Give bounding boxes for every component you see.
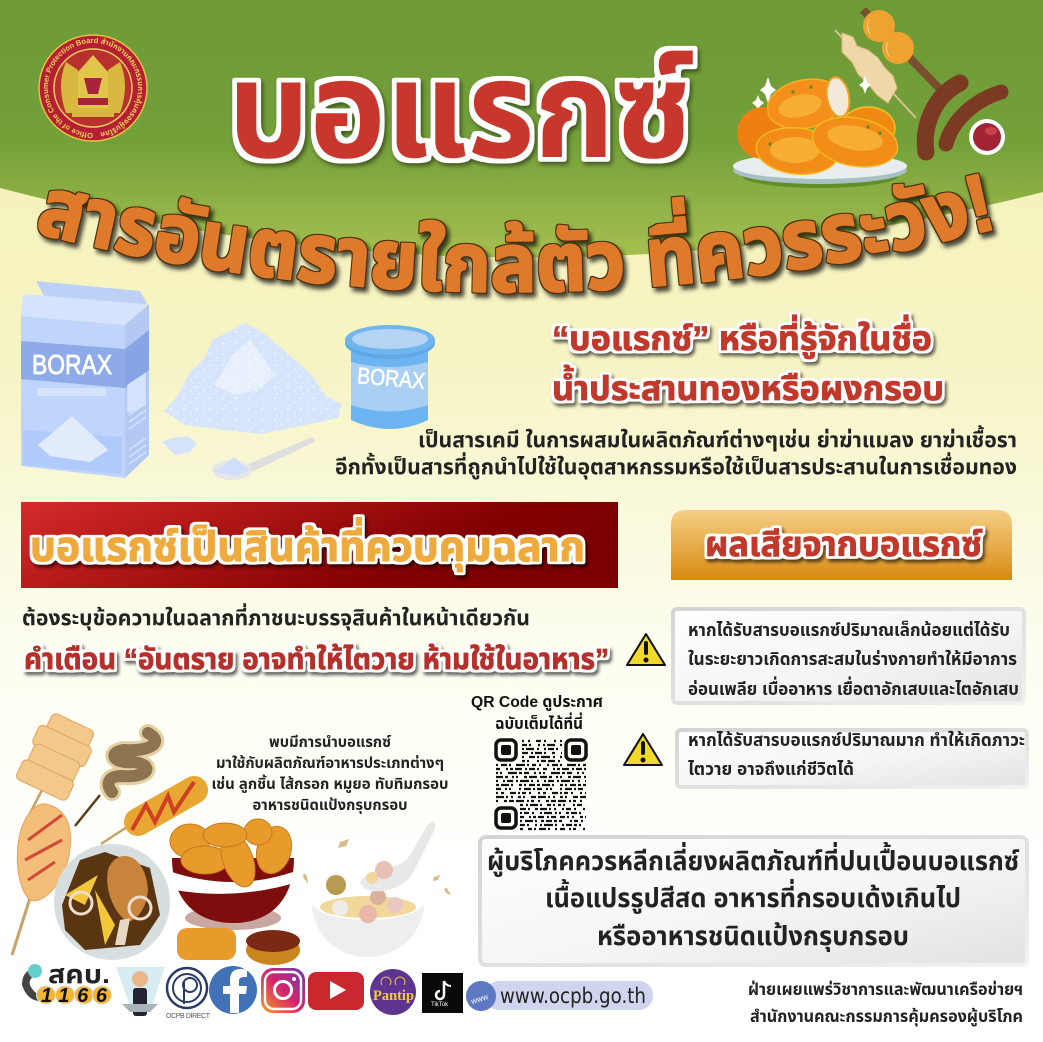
banner: harmful effects [671, 510, 1012, 580]
heading: also known as: “บอแรกซ์” หรือที่รู้จักในชื่อ [552, 314, 932, 359]
panel: consumer advice [480, 837, 1027, 965]
logo: youtube [308, 972, 364, 1010]
banner: controlled label [21, 502, 618, 588]
panel: consumer advice: ผู้บริโภคควรหลีกเลี่ยงผลิตภัณฑ์ที่ปนเปื้อนบอแรกซ์ [487, 842, 1020, 877]
icon: fried food plate [733, 10, 1005, 188]
banner: harmful effects: ผลเสียจากบอแรกซ์ [705, 525, 983, 564]
text block: foods found: มาใช้กับผลิตภัณฑ์อาหารประเภทต่างๆ [216, 754, 444, 772]
text block: foods found: พบมีการนำบอแรกซ์ [269, 734, 391, 751]
text block: borax description [335, 425, 1017, 480]
icon: powder pile [162, 323, 342, 455]
logo: tiktok [422, 973, 463, 1013]
heading: also known as [552, 314, 944, 408]
panel: small dose effect: ในระยะยาวเกิดการสะสมในร่างกายทำให้มีอาการ [688, 649, 1017, 669]
panel: small dose effect [673, 609, 1024, 703]
logo: OCPB direct [166, 968, 211, 1020]
icon: borax box: BORAX [32, 349, 112, 380]
icon: chicken plate [54, 844, 170, 960]
logo: mascot [116, 967, 165, 1016]
text block: QR caption: QR Code ดูประกาศ [471, 694, 603, 712]
icon: borax box [21, 281, 149, 478]
panel: consumer advice: หรืออาหารชนิดแป้งกรุบกรอบ [597, 921, 909, 952]
panel: large dose effect: หากได้รับสารบอแรกซ์ปริมาณมาก ทำให้เกิดภาวะ [688, 730, 1025, 750]
website link: www [469, 992, 489, 1006]
logo: tiktok: TikTok [431, 1002, 449, 1008]
icon: warning triangle 2 [624, 734, 662, 765]
panel: consumer advice: เนื้อแปรรูปสีสด อาหารที่กรอบเด้งเกินไป [545, 879, 961, 914]
logo: hotline: สคบ. [48, 959, 110, 989]
banner: controlled label: บอแรกซ์เป็นสินค้าที่ควบคุมฉลาก [30, 517, 585, 572]
logo: hotline [22, 959, 112, 1007]
title: บอแรกซ์ [228, 34, 693, 186]
text block: QR caption [471, 694, 603, 733]
icon: bowl of fried food [170, 819, 300, 965]
logo: hotline: 1166 [41, 985, 108, 1007]
text block: foods found [212, 734, 448, 814]
icon: borax cup [345, 325, 435, 429]
logo: facebook [209, 966, 257, 1014]
logo: instagram [261, 968, 305, 1013]
text block: foods found: เช่น ลูกชิ้น ไส้กรอก หมูยอ ทับทิมกรอบ [212, 774, 448, 794]
logo: OCPB direct: OCPB DIRECT [166, 1013, 211, 1020]
text block: label warning: คำเตือน “อันตราย อาจทำให้ไตวาย ห้ามใช้ในอาหาร” [24, 644, 609, 676]
icon: spoon [212, 437, 316, 480]
logo: pantip [370, 969, 416, 1015]
text block: issuing office: ฝ่ายเผยแพร่วิชาการและพัฒนาเครือข่ายฯ [748, 979, 1023, 999]
subtitle: สารอันตรายใกล้ตัว ที่ควรระวัง! [36, 172, 1000, 302]
panel: large dose effect: ไตวาย อาจถึงแก่ชีวิตได้ [688, 759, 854, 779]
icon: QR code [496, 740, 586, 829]
panel: large dose effect [677, 730, 1027, 787]
text block: issuing office: สำนักงานคณะกรรมการคุ้มครองผู้บริโภค [750, 1007, 1023, 1027]
icon: dessert bowl [303, 822, 451, 957]
seal logo: Office of the Consumer Protection Board สำนักงานคณะกรรมการคุ้มครองผู้บริโภค [44, 38, 142, 138]
text block: issuing office [748, 979, 1023, 1027]
text block: label requirement: ต้องระบุข้อความในฉลากที่ภาชนะบรรจุสินค้าในหน้าเดียวกัน [22, 603, 530, 631]
icon: warning triangle 1 [627, 634, 665, 665]
website link [466, 981, 653, 1011]
icon: borax cup: BORAX [356, 362, 426, 394]
heading: also known as: น้ำประสานทองหรือผงกรอบ [552, 364, 944, 408]
website link: www.ocpb.go.th [500, 984, 646, 1008]
text block: borax description: เป็นสารเคมี ในการผสมในผลิตภัณฑ์ต่างๆเช่น ย่าฆ่าแมลง ยาฆ่าเชื้อรา [418, 425, 1017, 452]
panel: small dose effect: อ่อนเพลีย เบื่ออาหาร เยื่อตาอักเสบและไตอักเสบ [688, 676, 1019, 699]
text block: QR caption: ฉบับเต็มได้ที่นี่ [495, 712, 583, 733]
logo: pantip: Pantip [373, 988, 414, 1004]
panel: small dose effect: หากได้รับสารบอแรกซ์ปริมาณเล็กน้อยแต่ได้รับ [688, 620, 1010, 640]
text block: borax description: อีกทั้งเป็นสารที่ถูกนำไปใช้ในอุตสาหกรรมหรือใช้เป็นสารประสานในการเชื่อมทอง [335, 452, 1017, 480]
text block: foods found: อาหารชนิดแป้งกรุบกรอบ [252, 797, 408, 814]
icon: food skewers [12, 712, 194, 955]
